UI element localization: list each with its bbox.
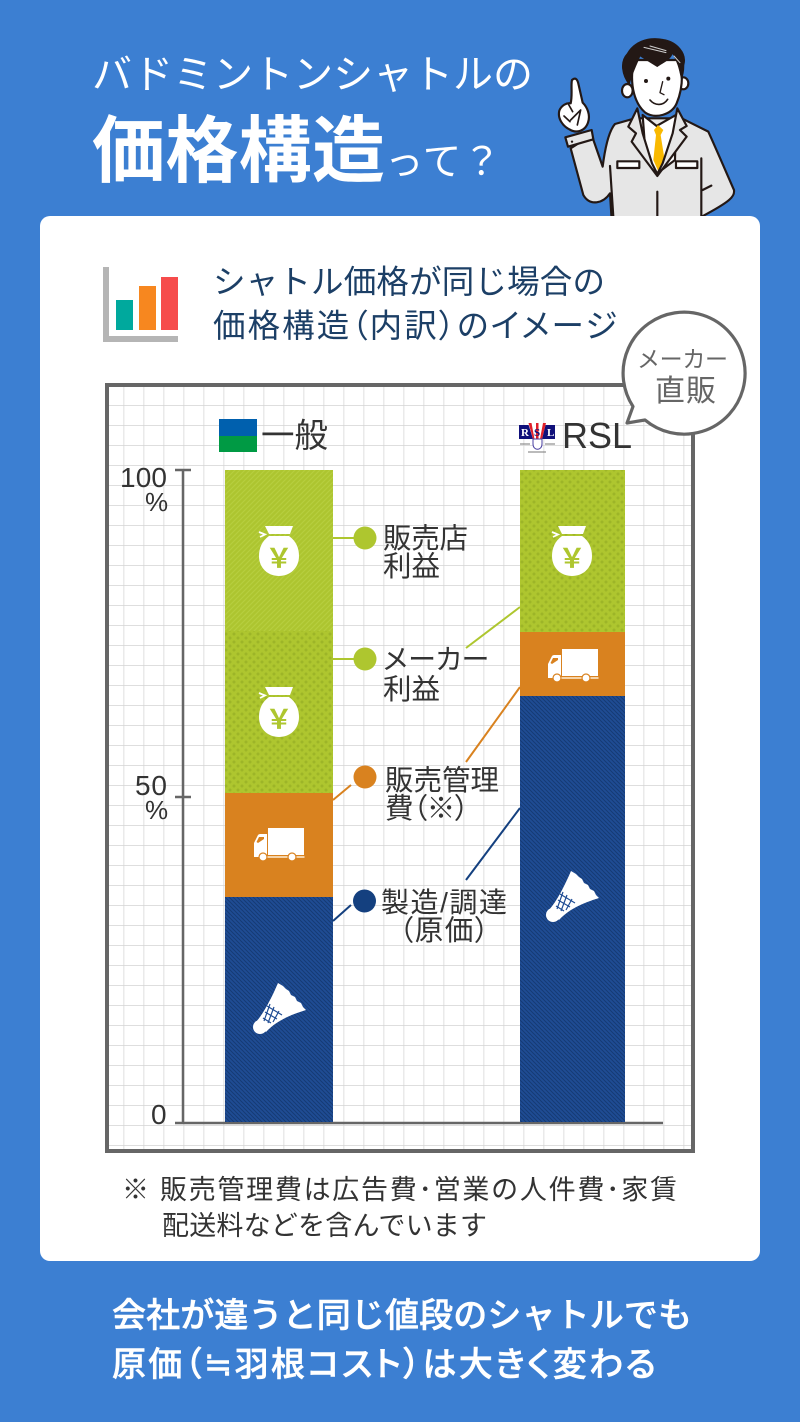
axis [120, 462, 663, 1130]
legend: maker profit: 利益 [383, 674, 440, 706]
icon: shuttlecock [546, 871, 599, 922]
footnote: 配送料などを含んでいます [162, 1211, 487, 1241]
legend: sales and admin cost: 販売管理 [385, 765, 499, 797]
icon: money bag retailer profit [259, 526, 299, 576]
icon: generic brand logo [219, 419, 257, 452]
legend: maker profit [333, 607, 520, 706]
legend: manufacturing cost: 製造/調達 [381, 887, 507, 918]
axis: % [145, 795, 168, 825]
legend: maker profit: メーカー [382, 644, 490, 675]
icon: shuttlecock [253, 983, 306, 1034]
legend: retailer profit [333, 523, 468, 583]
icon: money bag maker profit [259, 687, 299, 737]
title [92, 53, 533, 192]
axis: % [145, 487, 168, 517]
legend: sales and admin cost: 費（※） [385, 793, 469, 825]
callout: maker direct sales: メーカー [637, 346, 728, 372]
title: 価格構造 [92, 111, 385, 192]
conclusion text: 会社が違うと同じ値段のシャトルでも [112, 1297, 692, 1335]
title: バドミントンシャトルの [92, 53, 533, 97]
icon: RSL logo [519, 423, 555, 452]
legend: retailer profit: 販売店 [383, 523, 468, 555]
legend: manufacturing cost [333, 808, 520, 947]
bar: RSL stacked [520, 470, 625, 1122]
callout: maker direct sales [623, 312, 745, 434]
legend: manufacturing cost: （原価） [399, 915, 489, 947]
icon: RSL logo: L [547, 427, 554, 439]
icon: RSL logo: S [534, 427, 540, 439]
icon: money bag maker profit: ￥ [558, 544, 586, 574]
bar: generic stacked [225, 470, 333, 1122]
conclusion text [112, 1297, 692, 1384]
icon: bar chart [103, 267, 178, 342]
label: RSL: RSL [562, 415, 632, 456]
icon: RSL logo: R [521, 427, 530, 439]
axis: 100 [120, 462, 167, 493]
footnote [122, 1175, 677, 1241]
callout: maker direct sales: 直販 [655, 375, 716, 408]
chart frame with grid [107, 385, 693, 1151]
panel: white card [40, 216, 760, 1261]
legend: retailer profit: 利益 [383, 551, 440, 583]
icon: truck [254, 828, 304, 861]
legend: sales and admin cost [333, 687, 520, 825]
title: って？ [385, 141, 501, 184]
conclusion text: 原価（≒羽根コスト）は大きく変わる [112, 1346, 656, 1384]
heading: chart title: シャトル価格が同じ場合の [213, 264, 605, 300]
axis: 50 [135, 770, 167, 801]
label: generic: 一般 [261, 418, 328, 455]
icon: money bag maker profit [552, 526, 592, 576]
axis: 0 [151, 1099, 167, 1130]
footnote: ※ 販売管理費は広告費･営業の人件費･家賃 [122, 1175, 677, 1205]
heading: chart title [213, 264, 617, 344]
icon: money bag retailer profit: ￥ [266, 544, 292, 574]
icon: truck [548, 649, 598, 682]
illustration: man in work jacket pointing up [559, 38, 734, 220]
heading: chart title: 価格構造（内訳）のイメージ [213, 308, 617, 344]
icon: money bag maker profit: ￥ [266, 705, 292, 735]
